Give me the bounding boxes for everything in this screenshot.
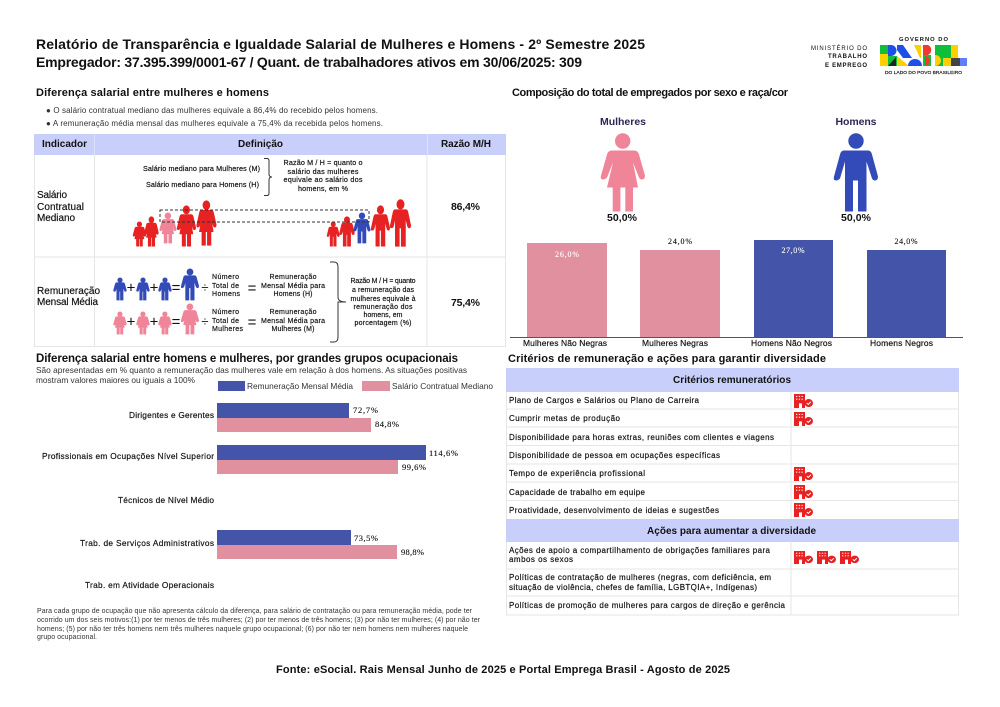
bar chart: grupos ocupacionais: Dirigentes e Gerentes	[129, 410, 214, 420]
title: Relatório de Transparência e Igualdade Salarial de Mulheres e Homens - 2º Semestre 2025	[36, 36, 645, 52]
bar chart: grupos ocupacionais: 73,5%	[354, 533, 378, 543]
razão explanation 2: remuneração dos	[354, 304, 413, 311]
definição: salário mediano	[143, 164, 260, 189]
ações rows: ambos os sexos	[509, 555, 573, 564]
table header: ações: Ações para aumentar a diversidade	[647, 526, 816, 537]
bar chart: grupos ocupacionais: 99,6%	[402, 462, 426, 472]
pictogram: homens	[834, 116, 878, 224]
critérios rows	[509, 396, 774, 515]
ações rows: Políticas de contratação de mulheres (negras, com deficiência, em	[509, 573, 771, 582]
icons: empresa, critérios	[794, 394, 813, 517]
razão explanation 2: a remuneração das	[352, 287, 414, 294]
critérios rows: Plano de Cargos e Salários ou Plano de Carreira	[509, 396, 700, 405]
bar chart: raça/cor: 27,0%	[782, 246, 805, 255]
bar chart: grupos ocupacionais: 114,6%	[429, 448, 458, 458]
icons: grupo de homens	[327, 200, 411, 246]
fórmula: homens: +	[150, 280, 159, 296]
fórmula: homens: +	[127, 280, 136, 296]
ações rows: Ações de apoio a compartilhamento de obrigações familiares para	[509, 546, 771, 555]
fórmula: homens: Número	[212, 274, 239, 281]
fórmula: mulheres: ÷	[201, 314, 209, 329]
logo: governo do brasil: DO LADO DO POVO BRASILEIRO	[885, 70, 962, 76]
heading: grupos ocupacionais: Diferença salarial entre homens e mulheres, por grandes grupos ocupacionais	[36, 353, 458, 365]
icons: grupo de mulheres	[133, 201, 216, 246]
logo: ministério: MINISTÉRIO DO	[811, 45, 867, 52]
description	[36, 365, 467, 385]
dashed median box	[160, 210, 369, 222]
bar chart: raça/cor: Homens Não Negros	[751, 338, 832, 348]
bar chart: grupos ocupacionais: Trab. de Serviços Administrativos	[80, 538, 214, 548]
razão explanation 1: homens, em %	[298, 184, 349, 193]
bar chart: grupos ocupacionais: 72,7%	[353, 405, 378, 415]
fórmula: mulheres: +	[127, 314, 136, 330]
critérios rows: Capacidade de trabalho em equipe	[509, 488, 646, 497]
value: 75,4%: 75,4%	[451, 297, 481, 309]
logo: ministério: TRABALHO	[828, 54, 867, 60]
bar chart: raça/cor: 26,0%	[555, 250, 579, 259]
pictogram: mulheres: Mulheres	[600, 116, 646, 128]
pictogram: mulheres	[600, 116, 646, 224]
fórmula: homens: Remuneração	[270, 274, 317, 281]
fórmula: homens: Mensal Média para	[261, 283, 325, 290]
logo: governo do brasil: GOVERNO DO	[899, 37, 948, 43]
bullets	[46, 106, 383, 128]
fórmula: homens: Homens (H)	[274, 291, 312, 298]
fórmula: homens: ÷	[201, 280, 209, 295]
bar chart: raça/cor	[510, 237, 963, 348]
razão explanation 2: porcentagem (%)	[354, 320, 412, 327]
definição: salário mediano: Salário mediano para Homens (H)	[146, 180, 259, 189]
bracket	[264, 158, 272, 196]
razão explanation 1	[284, 158, 363, 193]
fonte: Fonte: eSocial. Rais Mensal Junho de 2025 e Portal Emprega Brasil - Agosto de 2025	[276, 664, 730, 676]
heading: diferença salarial: Diferença salarial entre mulheres e homens	[36, 87, 269, 99]
table header	[42, 139, 491, 150]
row label: remuneração mensal média: Remuneração	[37, 286, 100, 297]
bullets: ● O salário contratual mediano das mulheres equivale a 86,4% do recebido pelos homens.	[46, 106, 378, 115]
pictogram: mulheres: 50,0%	[607, 212, 638, 224]
bar chart: raça/cor: Mulheres Não Negras	[523, 338, 607, 348]
razão explanation 2	[350, 278, 416, 327]
razão explanation 2: mulheres equivale à	[350, 296, 416, 303]
bar chart: raça/cor: Mulheres Negras	[642, 338, 708, 348]
row label: remuneração mensal média	[37, 286, 100, 308]
fórmula: mulheres: Mulheres (M)	[272, 326, 314, 333]
fórmula: homens: =	[172, 280, 181, 296]
fórmula: mulheres: =	[172, 314, 181, 330]
heading: composição: Composição do total de empregados por sexo e raça/cor	[512, 87, 789, 99]
legend	[218, 381, 493, 391]
bar chart: grupos ocupacionais: Técnicos de Nível Médio	[118, 495, 214, 505]
logo: ministério: E EMPREGO	[825, 63, 867, 69]
razão explanation 1: equivale ao salário dos	[284, 175, 363, 184]
icons: empresa, ações	[794, 551, 859, 564]
bar chart: grupos ocupacionais: 84,8%	[375, 419, 399, 429]
brace	[330, 262, 346, 342]
row label: salário contratual mediano: Contratual	[37, 202, 84, 213]
fórmula: mulheres: Mulheres	[212, 326, 244, 333]
fórmula: mulheres: Total de	[212, 318, 239, 325]
bar chart: raça/cor: Homens Negros	[870, 338, 933, 348]
critérios rows: Proatividade, desenvolvimento de ideias e sugestões	[509, 506, 719, 515]
bar chart: grupos ocupacionais: Profissionais em Ocupações Nível Superior	[42, 451, 214, 461]
heading: critérios: Critérios de remuneração e ações para garantir diversidade	[508, 353, 826, 365]
bar chart: raça/cor: 24,0%	[894, 237, 918, 246]
fórmula: mulheres: Remuneração	[270, 309, 317, 316]
panel: tabela de indicadores	[34, 134, 506, 347]
razão explanation 2: homens, em	[364, 312, 403, 319]
legend: Remuneração Mensal Média	[247, 381, 353, 391]
logo: ministério	[811, 45, 867, 69]
ações rows: situação de violência, chefes de família, LGBTQIA+, Indígenas)	[509, 583, 757, 592]
bullets: ● A remuneração média mensal das mulheres equivale a 75,4% da recebida pelos homens.	[46, 119, 383, 128]
footnote: ocorrido um dos seis motivos:(1) por ter menos de três mulheres; (2) por ter menos de três homens; (3) por não ter mulheres; (4) por não ter	[37, 617, 481, 624]
critérios rows: Cumprir metas de produção	[509, 414, 621, 423]
critérios rows: Disponibilidade para horas extras, reuniões com clientes e viagens	[509, 433, 774, 442]
definição: salário mediano: Salário mediano para Mulheres (M)	[143, 164, 260, 173]
fórmula: mulheres: Número	[212, 309, 239, 316]
ações rows	[509, 546, 786, 610]
footnote: grupo ocupacional.	[37, 634, 97, 641]
pictogram: homens: Homens	[836, 116, 877, 128]
bar chart: grupos ocupacionais: 98,8%	[401, 547, 424, 557]
footnote	[37, 608, 481, 641]
critérios rows: Tempo de experiência profissional	[509, 469, 645, 478]
row label: salário contratual mediano: Mediano	[37, 213, 75, 224]
bar chart: grupos ocupacionais: Trab. em Atividade Operacionais	[85, 580, 214, 590]
ações rows: Políticas de promoção de mulheres para cargos de direção e gerência	[509, 601, 786, 610]
razão explanation 1: salário das mulheres	[288, 167, 359, 176]
bar chart: grupos ocupacionais	[42, 403, 458, 590]
logo: governo do brasil	[880, 37, 967, 76]
fórmula: homens	[114, 269, 325, 300]
critérios rows: Disponibilidade de pessoa em ocupações específicas	[509, 451, 720, 460]
table header: Indicador	[42, 139, 87, 150]
fórmula: mulheres	[114, 304, 325, 334]
table header: Definição	[238, 139, 283, 150]
bar chart: raça/cor: 24,0%	[668, 237, 692, 246]
fórmula: mulheres: Mensal Média para	[261, 318, 325, 325]
fórmula: homens: =	[248, 280, 257, 297]
footnote: homens; (5) por não ter três homens nem três mulheres naquele grupo ocupacional; (6) por não ter nem homens nem mulheres naquele	[37, 626, 468, 633]
row label: salário contratual mediano	[37, 190, 84, 224]
description: São apresentadas em % quanto a remuneração das mulheres vale em relação à dos homens. As situações positivas	[36, 365, 467, 375]
row label: remuneração mensal média: Mensal Média	[37, 297, 98, 308]
fórmula: homens: Total de	[212, 283, 239, 290]
razão explanation 2: Razão M / H = quanto	[350, 278, 416, 285]
razão explanation 1: Razão M / H = quanto o	[284, 158, 362, 167]
panel: critérios e ações	[506, 368, 959, 615]
title	[36, 36, 645, 70]
pictogram: homens: 50,0%	[841, 212, 872, 224]
description: mostram valores maiores ou iguais a 100%	[36, 375, 196, 385]
row label: salário contratual mediano: Salário	[37, 190, 67, 201]
table header: critérios: Critérios remuneratórios	[673, 375, 791, 386]
fórmula: homens: Homens	[212, 291, 240, 298]
fórmula: mulheres: +	[150, 314, 159, 330]
table header: Razão M/H	[441, 139, 491, 150]
value: 86,4%: 86,4%	[451, 201, 481, 213]
fórmula: mulheres: =	[248, 314, 257, 331]
footnote: Para cada grupo de ocupação que não apresenta cálculo da diferença, para salário de contratação ou para remuneração média, pode ter	[37, 608, 473, 615]
title: Empregador: 37.395.399/0001-67 / Quant. de trabalhadores ativos em 30/06/2025: 309	[36, 54, 582, 70]
legend: Salário Contratual Mediano	[392, 381, 493, 391]
